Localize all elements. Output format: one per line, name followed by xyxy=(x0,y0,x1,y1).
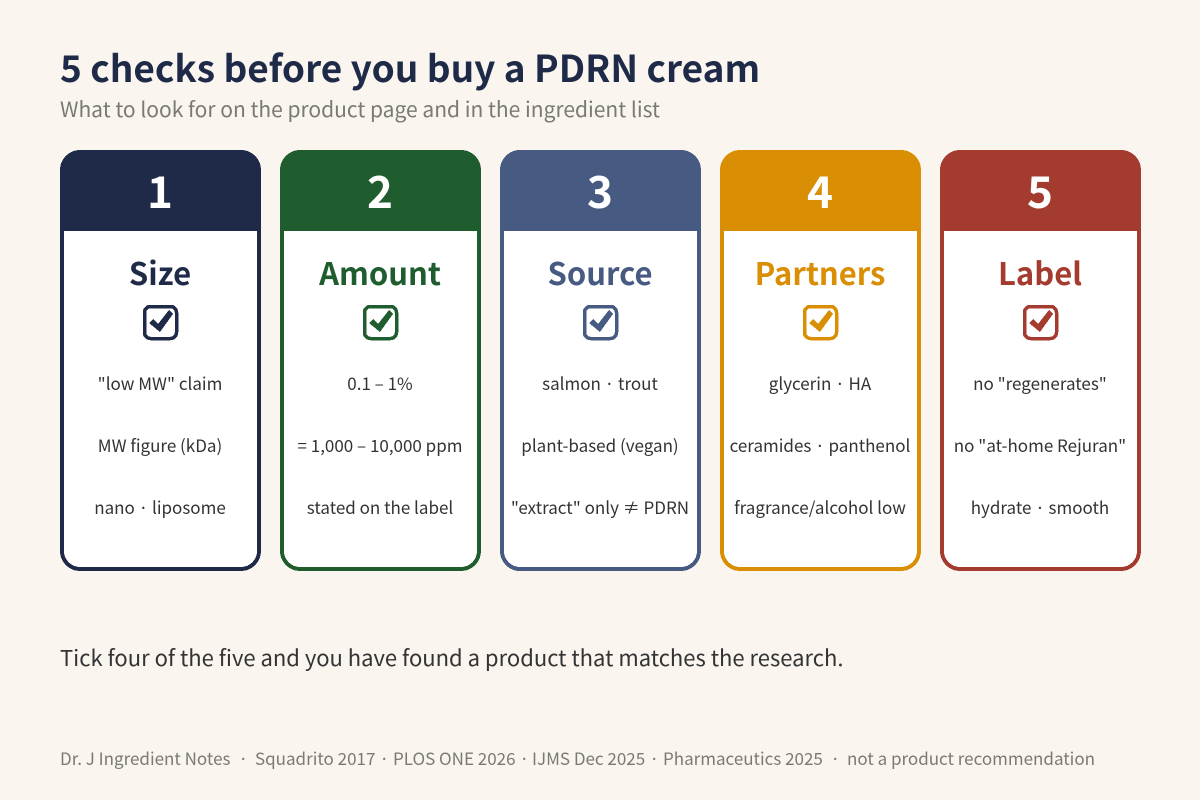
panel: check 4 partners: fragrance/alcohol low xyxy=(734,494,906,519)
panel: check 2 amount: stated on the label xyxy=(307,494,453,519)
footer sources: · xyxy=(380,745,389,770)
icon: check box xyxy=(144,306,176,338)
panel: check 2 amount: 0.1 – 1% xyxy=(347,370,413,395)
panel: check 5 label: no "at-home Rejuran" xyxy=(954,432,1126,457)
panel: check 1 size: Size xyxy=(129,249,191,294)
panel: check 3 source: salmon · trout xyxy=(542,370,658,395)
panel: check 4 partners: Partners xyxy=(755,249,885,294)
panel: check 2 amount: = 1,000 – 10,000 ppm xyxy=(298,432,462,457)
panel: check 4 partners: ceramides · panthenol xyxy=(730,432,911,457)
icon: check box xyxy=(804,306,836,338)
panel: check 3 source: plant-based (vegan) xyxy=(521,432,679,457)
panel: check 4 partners: glycerin · HA xyxy=(769,370,872,395)
panel: check 1 size xyxy=(60,150,261,569)
icon: check box xyxy=(1024,306,1056,338)
icon: check box xyxy=(364,306,396,338)
footer sources: · xyxy=(520,745,529,770)
panel: check 1 size: "low MW" claim xyxy=(98,370,222,395)
footer sources: · xyxy=(650,745,659,770)
panel: check 2 amount: 2 xyxy=(367,157,393,221)
panel: check 5 label: Label xyxy=(998,249,1082,294)
conclusion text: Tick four of the five and you have found a product that matches the research. xyxy=(60,641,843,673)
panel: check 3 source: 3 xyxy=(587,157,613,221)
footer sources: · xyxy=(830,745,840,770)
panel: check 3 source xyxy=(500,150,701,569)
panel: check 5 label xyxy=(940,150,1141,569)
panel: check 1 size: nano · liposome xyxy=(94,494,226,519)
panel: check 3 source: "extract" only ≠ PDRN xyxy=(511,494,689,519)
panel: check 4 partners xyxy=(720,150,921,569)
panel: check 5 label: 5 xyxy=(1027,157,1053,221)
panel: check 2 amount: Amount xyxy=(318,249,441,294)
panel: check 1 size: MW figure (kDa) xyxy=(98,432,222,457)
panel: check 3 source: Source xyxy=(547,249,653,294)
footer sources: Dr. J Ingredient Notes xyxy=(60,745,230,770)
footer sources: not a product recommendation xyxy=(847,745,1095,770)
footer sources: Pharmaceutics 2025 xyxy=(663,745,823,770)
title: 5 checks before you buy a PDRN cream xyxy=(60,39,760,93)
panel: check 1 size: 1 xyxy=(147,157,173,221)
footer sources: · xyxy=(238,745,248,770)
panel: check 5 label: hydrate · smooth xyxy=(971,494,1109,519)
icon: check box xyxy=(584,306,616,338)
panel: check 5 label: no "regenerates" xyxy=(973,370,1107,395)
panel: check 4 partners: 4 xyxy=(807,157,833,221)
footer sources: IJMS Dec 2025 xyxy=(532,745,645,770)
footer sources: PLOS ONE 2026 xyxy=(393,745,516,770)
footer sources: Squadrito 2017 xyxy=(255,745,375,770)
panel: check 2 amount xyxy=(280,150,481,569)
subtitle: What to look for on the product page and in the ingredient list xyxy=(60,94,660,124)
